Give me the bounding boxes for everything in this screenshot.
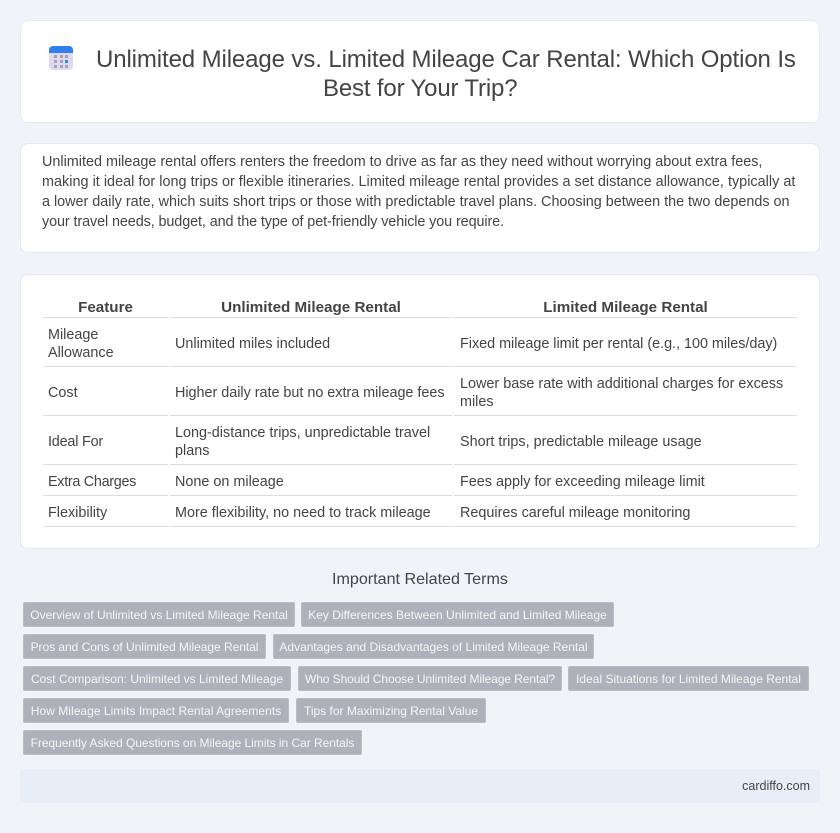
table: comparison: More flexibility, no need to track mileage (175, 505, 431, 521)
tag group: related terms: Key Differences Between Unlimited and Limited Mileage (308, 608, 607, 622)
table: comparison: Requires careful mileage monitoring (460, 505, 690, 521)
tag group: related terms: How Mileage Limits Impact Rental Agreements (31, 704, 281, 718)
table: comparison: Limited Mileage Rental (543, 299, 708, 316)
text block: introduction (42, 154, 796, 230)
tag group: related terms (23, 602, 809, 755)
table: comparison: Feature (78, 299, 133, 316)
table: comparison: Short trips, predictable mileage usage (460, 434, 702, 450)
table: comparison (43, 299, 797, 527)
title (96, 46, 796, 102)
tag group: related terms: Advantages and Disadvantages of Limited Mileage Rental (279, 640, 588, 654)
table: comparison: Unlimited Mileage Rental (221, 299, 401, 316)
text block: introduction: making it ideal for long trips or flexible itineraries. Limited mileage rental provides a set distance allowance, typically at (42, 174, 795, 190)
tag group: related terms: Ideal Situations for Limited Mileage Rental (576, 672, 801, 686)
table: comparison: Extra Charges (48, 474, 136, 490)
table: comparison: Cost (48, 385, 78, 401)
tag group: related terms: Cost Comparison: Unlimited vs Limited Mileage (31, 672, 283, 686)
table: comparison: Fixed mileage limit per rental (e.g., 100 miles/day) (460, 336, 777, 352)
heading: important related terms: Important Related Terms (332, 570, 508, 588)
panel: comparison table (20, 274, 820, 549)
panel: header (20, 20, 820, 123)
table: comparison: Unlimited miles included (175, 336, 330, 352)
table: comparison: Higher daily rate but no extra mileage fees (175, 385, 445, 401)
table: comparison: Allowance (48, 345, 114, 361)
table: comparison: plans (175, 443, 209, 459)
table: comparison: Fees apply for exceeding mileage limit (460, 474, 705, 490)
panel: introduction (20, 143, 820, 253)
title: Best for Your Trip? (323, 75, 517, 102)
table: comparison: Lower base rate with additional charges for excess (460, 376, 783, 392)
tag group: related terms: Tips for Maximizing Rental Value (304, 704, 478, 718)
icon: calendar (49, 46, 73, 70)
text block: introduction: Unlimited mileage rental offers renters the freedom to drive as far as they need without worrying about extra fees, (42, 154, 762, 170)
tag group: related terms: Who Should Choose Unlimited Mileage Rental? (305, 672, 555, 686)
title: Unlimited Mileage vs. Limited Mileage Car Rental: Which Option Is (96, 46, 796, 73)
tag group: related terms: Frequently Asked Questions on Mileage Limits in Car Rentals (31, 736, 354, 750)
table: comparison: miles (460, 394, 494, 410)
tag group: related terms: Pros and Cons of Unlimited Mileage Rental (31, 640, 258, 654)
footer (20, 769, 820, 803)
text block: introduction: your travel needs, budget, and the type of pet-friendly vehicle you require. (42, 214, 504, 230)
text block: introduction: a lower daily rate, which suits short trips or those with predictable travel plans. Choosing between the two depends on (42, 194, 790, 210)
table: comparison: Flexibility (48, 505, 107, 521)
table: comparison: None on mileage (175, 474, 284, 490)
table: comparison: Long-distance trips, unpredictable travel (175, 425, 430, 441)
table: comparison: Ideal For (48, 434, 103, 450)
tag group: related terms: Overview of Unlimited vs Limited Mileage Rental (30, 608, 288, 622)
footer credit: cardiffo.com (742, 779, 810, 793)
table: comparison: Mileage (48, 327, 98, 343)
